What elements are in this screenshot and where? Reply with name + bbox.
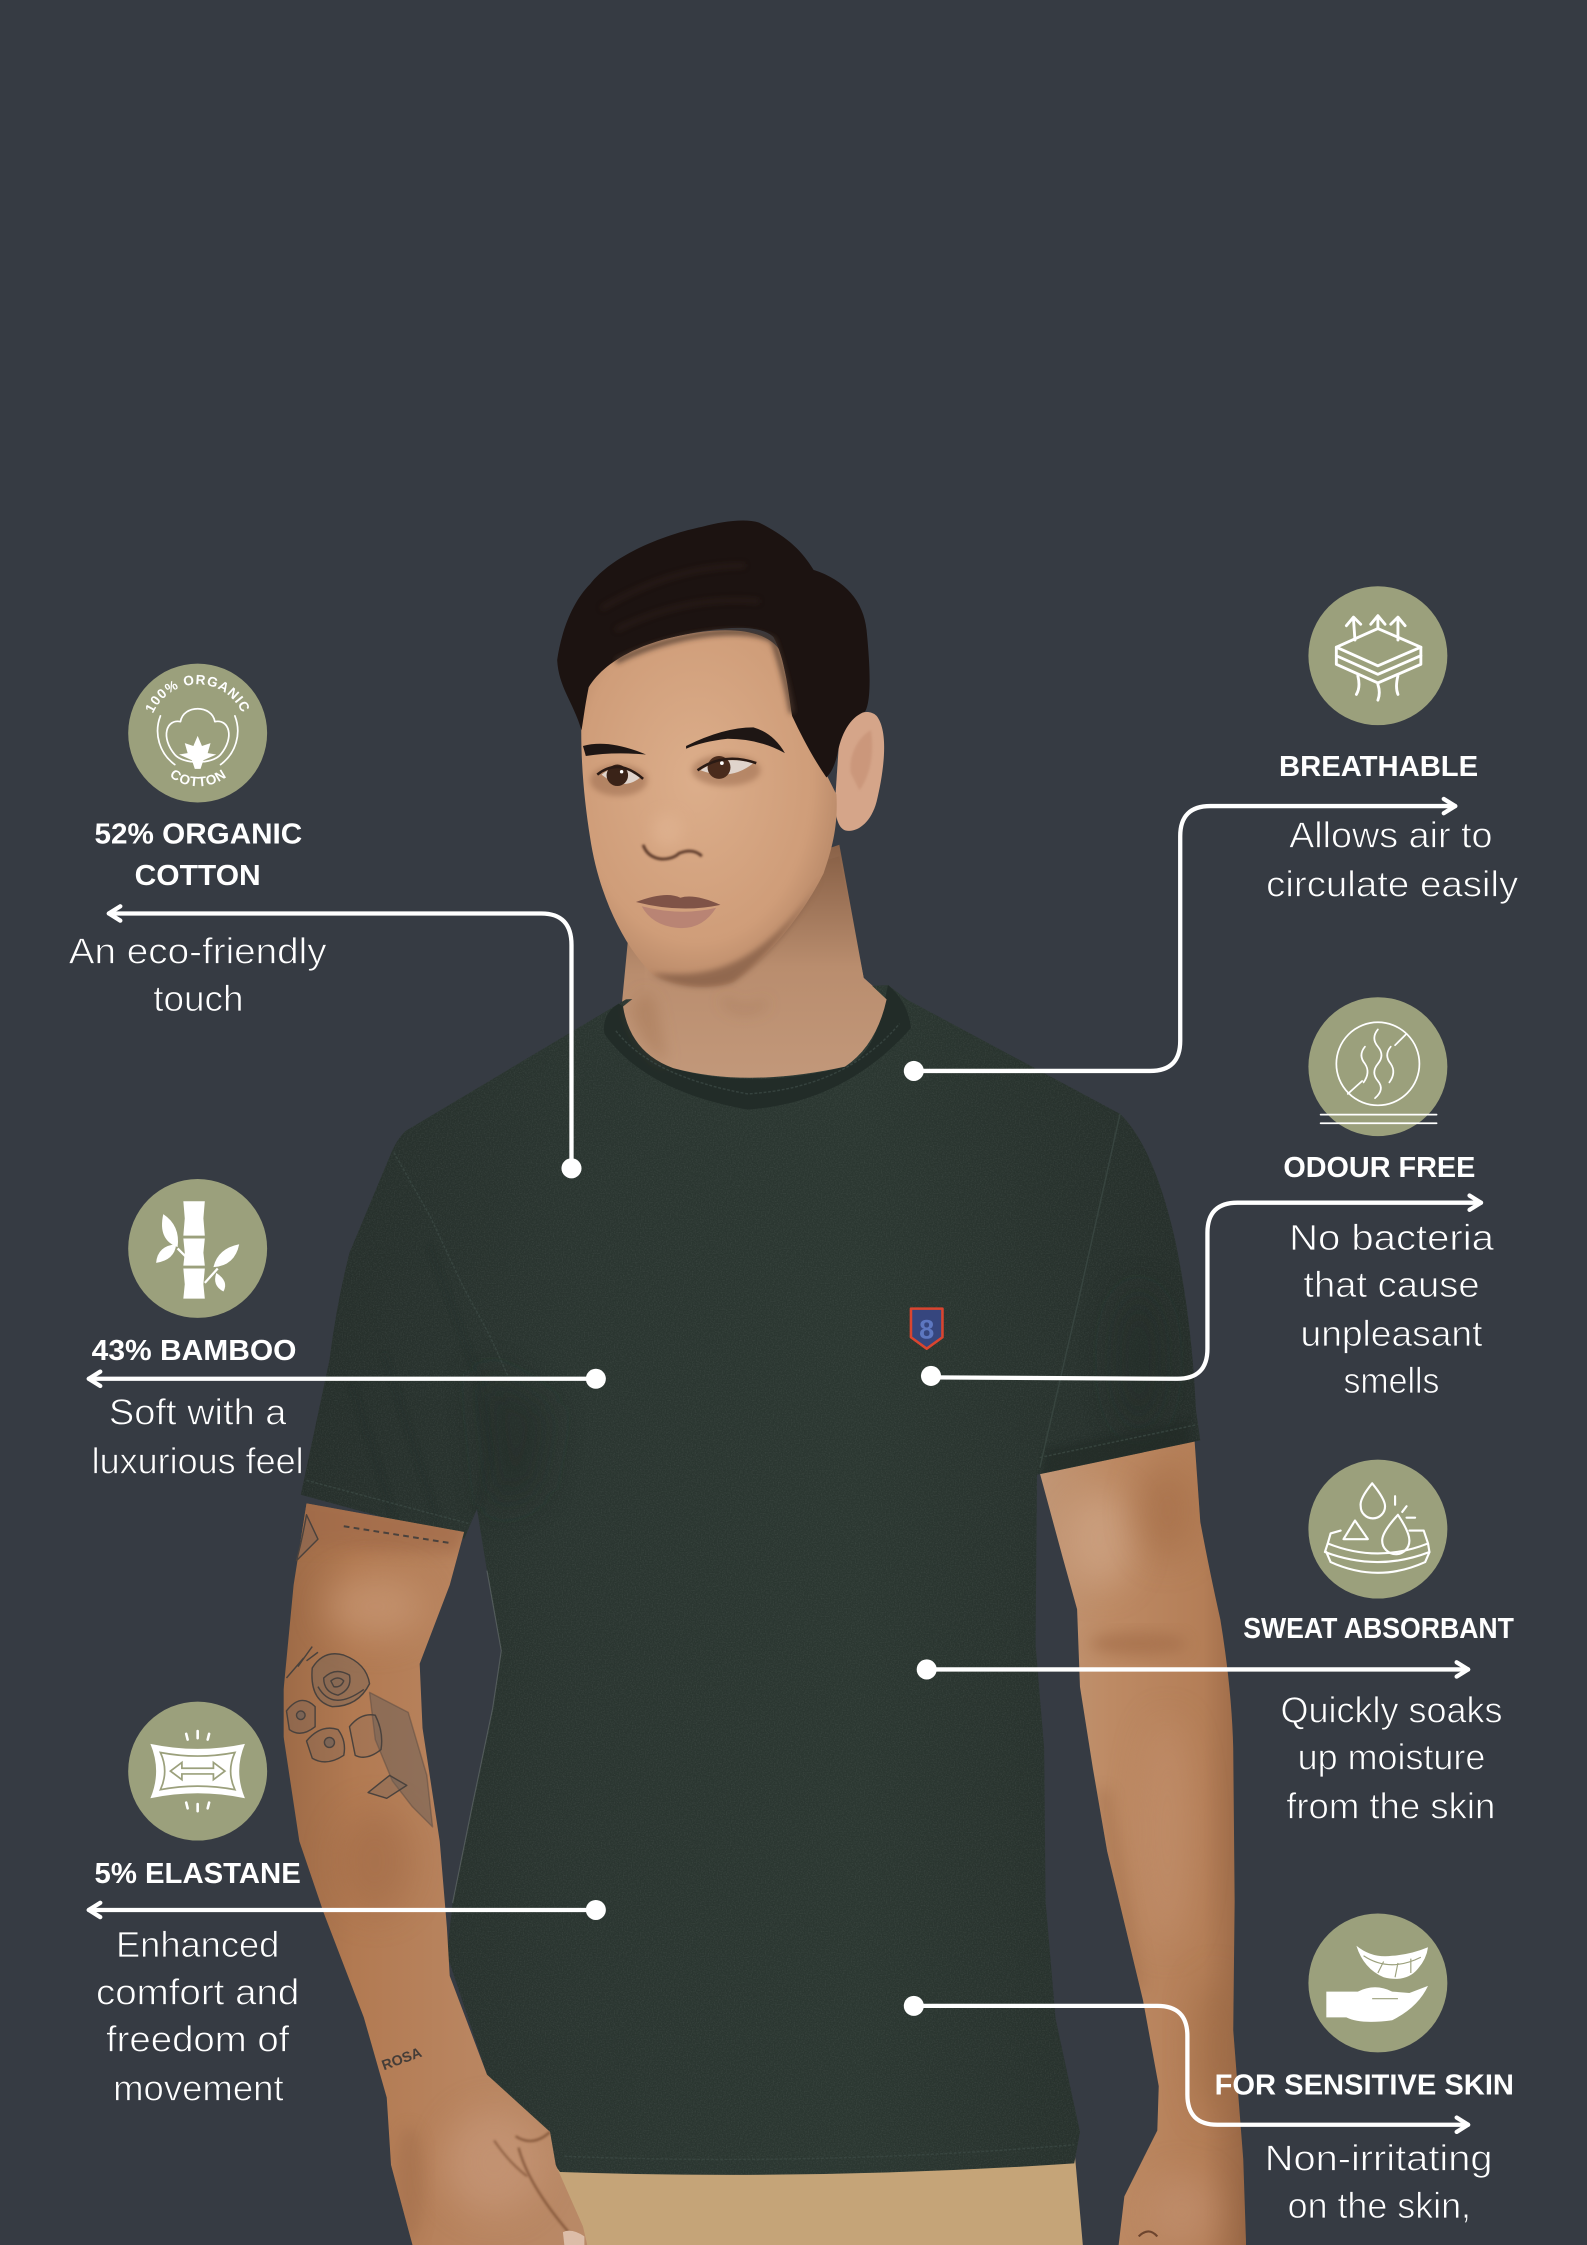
icon: breathable fabric layers bbox=[1308, 586, 1447, 725]
description bbox=[92, 1392, 304, 1481]
arrow: elastane connector bbox=[89, 1900, 606, 1920]
neck opening skin bbox=[623, 856, 887, 1078]
hairline softening bbox=[616, 632, 792, 713]
heading: 52% ORGANIC bbox=[95, 818, 302, 850]
jaw shadow bbox=[652, 873, 824, 987]
description: circulate easily bbox=[1266, 863, 1519, 904]
arrow: odour connector bbox=[921, 1196, 1481, 1386]
heading line two: COTTON bbox=[135, 860, 261, 892]
hair bbox=[557, 521, 870, 777]
right arm bbox=[1040, 1442, 1246, 2245]
description: Soft with a bbox=[109, 1392, 287, 1433]
t-shirt bbox=[286, 974, 1217, 2191]
feature: 43% bamboo bbox=[89, 1179, 606, 1481]
description bbox=[1289, 1217, 1495, 1401]
neck shading bbox=[630, 991, 766, 1064]
icon: no odour bbox=[1308, 997, 1447, 1136]
description bbox=[96, 1924, 299, 2108]
arrow: breathable connector bbox=[904, 799, 1455, 1081]
feature: for sensitive skin bbox=[904, 1914, 1514, 2226]
description: luxurious feel bbox=[92, 1440, 304, 1481]
description: movement bbox=[113, 2067, 284, 2108]
left arm bbox=[272, 1489, 602, 2245]
description bbox=[1265, 2138, 1492, 2226]
feature: 52% organic cotton bbox=[69, 664, 582, 1178]
description bbox=[1280, 1689, 1502, 1826]
description: comfort and bbox=[96, 1971, 299, 2012]
description bbox=[1266, 815, 1519, 904]
ear bbox=[835, 712, 884, 831]
wrist tattoo: ROSA bbox=[380, 2045, 424, 2074]
heading: 43% BAMBOO bbox=[92, 1335, 296, 1367]
heading: ODOUR FREE bbox=[1283, 1152, 1475, 1184]
eyebrows bbox=[583, 744, 646, 756]
description: No bacteria bbox=[1289, 1217, 1495, 1258]
description: An eco-friendly bbox=[69, 931, 327, 972]
description: unpleasant bbox=[1301, 1313, 1482, 1354]
icon: sweat drops on fabric bbox=[1308, 1460, 1447, 1599]
hair highlights bbox=[602, 566, 759, 630]
feature: breathable bbox=[904, 586, 1519, 1081]
description bbox=[69, 931, 327, 1019]
icon: feather over hand bbox=[1308, 1914, 1447, 2052]
neck bbox=[622, 845, 888, 1105]
left eye bbox=[597, 765, 643, 786]
logo: embroidered shield bbox=[911, 1309, 942, 1349]
arrow: cotton connector bbox=[109, 906, 582, 1178]
heading: FOR SENSITIVE SKIN bbox=[1215, 2070, 1514, 2102]
description: Allows air to bbox=[1289, 815, 1492, 856]
description: up moisture bbox=[1298, 1737, 1485, 1778]
description: smells bbox=[1344, 1360, 1439, 1401]
face bbox=[581, 630, 837, 987]
description: Quickly soaks bbox=[1280, 1689, 1502, 1730]
arrow: sensitive skin connector bbox=[904, 1996, 1468, 2132]
description: from the skin bbox=[1286, 1785, 1495, 1826]
feature: sweat absorbant bbox=[917, 1460, 1514, 1826]
arrow: bamboo connector bbox=[89, 1369, 606, 1389]
description: that cause bbox=[1303, 1264, 1480, 1305]
right eye bbox=[698, 756, 756, 779]
feature: 5% elastane bbox=[89, 1702, 606, 2108]
cutout halo along shirt side bbox=[453, 1571, 501, 1903]
shirt seams bbox=[307, 1024, 1197, 2159]
tattoo: rose and flowers bbox=[286, 1515, 453, 1827]
icon: organic cotton badge: 100% ORGANIC bbox=[146, 674, 249, 713]
description: freedom of bbox=[106, 2019, 290, 2060]
icon: bamboo bbox=[128, 1179, 267, 1318]
arrow: sweat connector bbox=[917, 1659, 1468, 1679]
description: on the skin, bbox=[1288, 2185, 1471, 2226]
heading: 5% ELASTANE bbox=[95, 1858, 301, 1890]
icon: stretch pillow bbox=[128, 1702, 267, 1841]
head bbox=[557, 521, 884, 987]
model photo: man wearing green t-shirt bbox=[272, 521, 1260, 2245]
heading: SWEAT ABSORBANT bbox=[1243, 1613, 1514, 1645]
description: Enhanced bbox=[116, 1924, 279, 1965]
khaki trousers bbox=[513, 2148, 1083, 2245]
icon: organic cotton badge: COTTON bbox=[171, 770, 226, 786]
eye sockets bbox=[590, 755, 761, 796]
description: touch bbox=[153, 978, 243, 1019]
collar band bbox=[604, 985, 911, 1110]
feature: odour free bbox=[921, 997, 1495, 1401]
icon: organic cotton badge bbox=[128, 664, 268, 802]
lips bbox=[636, 895, 720, 909]
heading: BREATHABLE bbox=[1279, 751, 1478, 783]
logo: embroidered shield: 8 bbox=[919, 1314, 934, 1345]
nose bbox=[643, 813, 702, 859]
description: Non-irritating bbox=[1265, 2138, 1492, 2179]
